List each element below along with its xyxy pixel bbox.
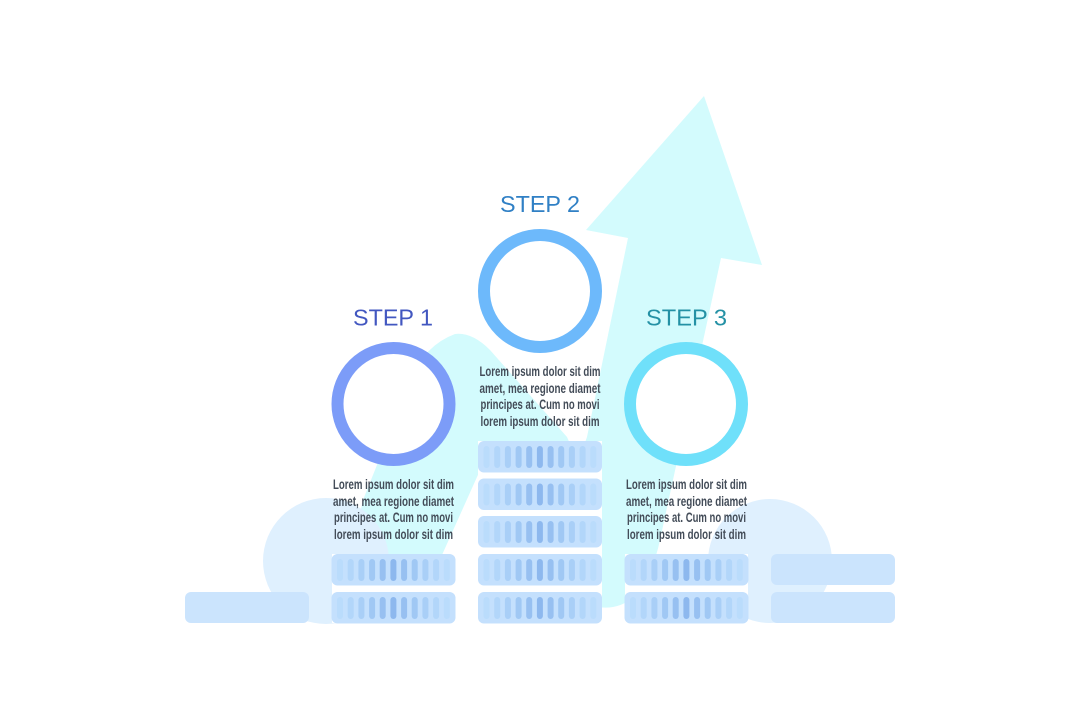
step 2 coin stack (478, 441, 602, 624)
step 3 text block: lorem ipsum dolor sit dim (627, 527, 746, 542)
step 2 text block: principes at. Cum no movi (480, 397, 600, 412)
step 2 text block: Lorem ipsum dolor sit dim (480, 364, 600, 379)
far left plain coin (185, 592, 309, 623)
step 3 heading: STEP 3 (646, 304, 727, 330)
step 3 text block: Lorem ipsum dolor sit dim (626, 477, 747, 492)
panel: step 2 (478, 191, 604, 624)
step 1 text block: lorem ipsum dolor sit dim (334, 527, 453, 542)
step 1 text block: principes at. Cum no movi (334, 510, 453, 525)
step 1 text block: amet, mea regione diamet (333, 494, 454, 509)
step 3 coin stack (624, 554, 748, 624)
step 2 ring (484, 235, 596, 347)
background cloud left (263, 498, 389, 624)
step 1 heading: STEP 1 (353, 304, 433, 330)
step 2 text block: amet, mea regione diamet (480, 381, 601, 396)
panel: step 1 (332, 304, 458, 624)
step 3 text block: amet, mea regione diamet (626, 494, 747, 509)
step 1 coin stack (332, 554, 456, 624)
background growth arrow (336, 96, 762, 622)
step 1 text block: Lorem ipsum dolor sit dim (333, 477, 454, 492)
white backing for coin stacks (332, 441, 748, 623)
background cloud right (708, 499, 832, 623)
far right plain coin stack (771, 554, 895, 623)
step 3 ring (630, 348, 742, 460)
step 1 ring (338, 348, 450, 460)
step 2 text block: lorem ipsum dolor sit dim (480, 414, 600, 429)
panel: step 3 (624, 304, 751, 624)
step 2 heading: STEP 2 (500, 191, 580, 217)
step 3 text block: principes at. Cum no movi (627, 510, 746, 525)
